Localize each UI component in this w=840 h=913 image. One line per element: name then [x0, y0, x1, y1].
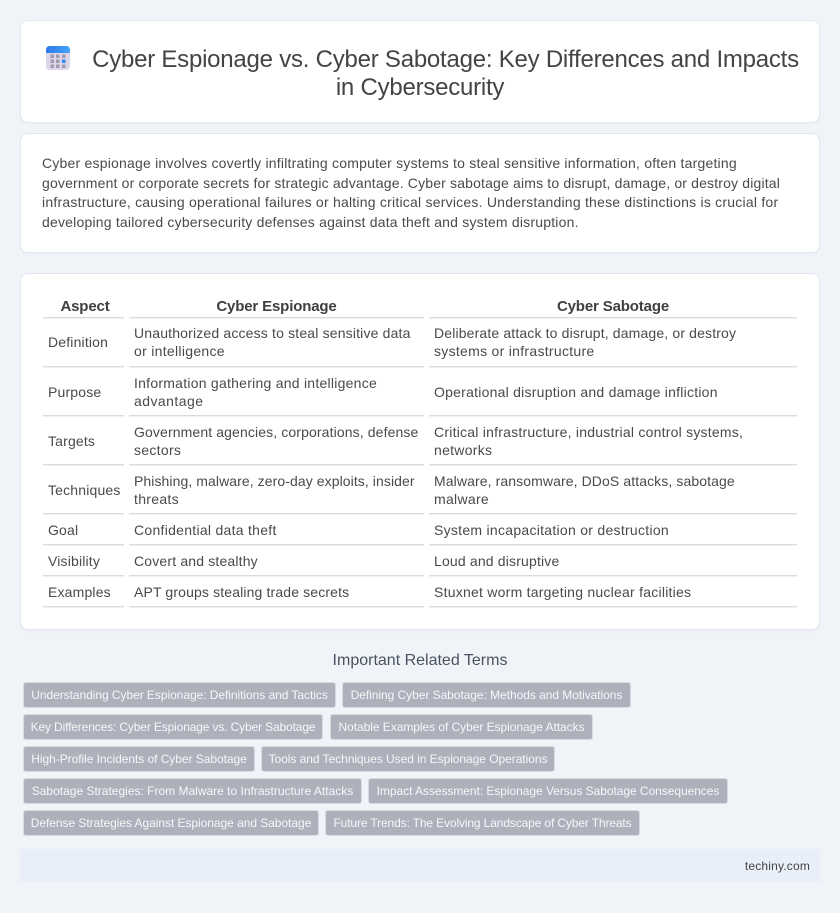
row: techniques: Techniques	[48, 482, 121, 498]
row: purpose: Operational disruption and damage infliction	[434, 384, 718, 400]
row: examples: Stuxnet worm targeting nuclear facilities	[434, 584, 691, 600]
row: targets: sectors	[134, 442, 181, 458]
footer source: techiny.com	[745, 859, 810, 873]
related term tags: Defining Cyber Sabotage: Methods and Motivations	[351, 688, 622, 702]
title: in Cybersecurity	[336, 74, 504, 101]
row: techniques: threats	[134, 491, 179, 507]
description text: developing tailored cybersecurity defenses against data theft and system disruption.	[42, 214, 579, 230]
description text: government or corporate secrets for strategic advantage. Cyber sabotage aims to disrupt, damage, or destroy digital	[42, 174, 780, 190]
related term tags: Tools and Techniques Used in Espionage Operations	[269, 752, 547, 766]
icon: calendar grid	[46, 46, 70, 70]
description text	[42, 155, 780, 230]
header card	[20, 20, 820, 123]
row: definition	[48, 325, 736, 359]
row: examples: APT groups stealing trade secrets	[134, 584, 349, 600]
related term tags: Notable Examples of Cyber Espionage Attacks	[338, 720, 584, 734]
row: targets: Government agencies, corporations, defense	[134, 424, 418, 440]
row: visibility: Covert and stealthy	[134, 553, 258, 569]
row: definition: or intelligence	[134, 343, 225, 359]
row: targets: Targets	[48, 433, 95, 449]
row: definition: Unauthorized access to steal sensitive data	[134, 325, 411, 341]
comparison table	[43, 298, 797, 608]
title: Cyber Espionage vs. Cyber Sabotage: Key Differences and Impacts	[92, 46, 799, 73]
row: purpose	[48, 375, 718, 409]
column headings: Cyber Sabotage	[557, 298, 669, 315]
description text: Cyber espionage involves covertly infiltrating computer systems to steal sensitive information, often targeting	[42, 155, 737, 171]
related terms heading: Important Related Terms	[333, 652, 507, 669]
row: techniques: Phishing, malware, zero-day exploits, insider	[134, 473, 415, 489]
related term tags: Key Differences: Cyber Espionage vs. Cyber Sabotage	[31, 720, 315, 734]
footer bar	[20, 849, 820, 882]
row: targets	[48, 424, 743, 458]
row: visibility: Loud and disruptive	[434, 553, 559, 569]
row: goal: Goal	[48, 522, 78, 538]
column headings: Cyber Espionage	[216, 298, 337, 315]
row: targets: networks	[434, 442, 492, 458]
title	[92, 46, 799, 101]
related term tags	[23, 682, 728, 836]
row: definition: Deliberate attack to disrupt, damage, or destroy	[434, 325, 736, 341]
description text: infrastructure, causing operational failures or halting critical services. Understanding these distinctions is crucial for	[42, 194, 778, 210]
related term tags: Sabotage Strategies: From Malware to Infrastructure Attacks	[32, 784, 353, 798]
row: visibility: Visibility	[48, 553, 100, 569]
row: techniques: Malware, ransomware, DDoS attacks, sabotage	[434, 473, 735, 489]
related term tags: Defense Strategies Against Espionage and Sabotage	[31, 816, 311, 830]
row: purpose: Purpose	[48, 384, 101, 400]
row: purpose: advantage	[134, 393, 203, 409]
row: goal: Confidential data theft	[134, 522, 277, 538]
table card	[20, 273, 820, 630]
row: examples	[48, 584, 691, 600]
row: techniques	[48, 473, 735, 507]
related term tags: Understanding Cyber Espionage: Definitions and Tactics	[31, 688, 328, 702]
related term tags: High-Profile Incidents of Cyber Sabotage	[31, 752, 247, 766]
column headings	[60, 298, 669, 315]
row: goal: System incapacitation or destruction	[434, 522, 669, 538]
description card	[20, 133, 820, 253]
row: definition: systems or infrastructure	[434, 343, 595, 359]
row: techniques: malware	[434, 491, 489, 507]
row: definition: Definition	[48, 334, 108, 350]
related term tags: Impact Assessment: Espionage Versus Sabotage Consequences	[377, 784, 719, 798]
row: visibility	[48, 553, 559, 569]
row: goal	[48, 522, 669, 538]
row: examples: Examples	[48, 584, 111, 600]
column headings: Aspect	[60, 298, 110, 315]
row: targets: Critical infrastructure, industrial control systems,	[434, 424, 743, 440]
related term tags: Future Trends: The Evolving Landscape of Cyber Threats	[333, 816, 632, 830]
row: purpose: Information gathering and intelligence	[134, 375, 377, 391]
